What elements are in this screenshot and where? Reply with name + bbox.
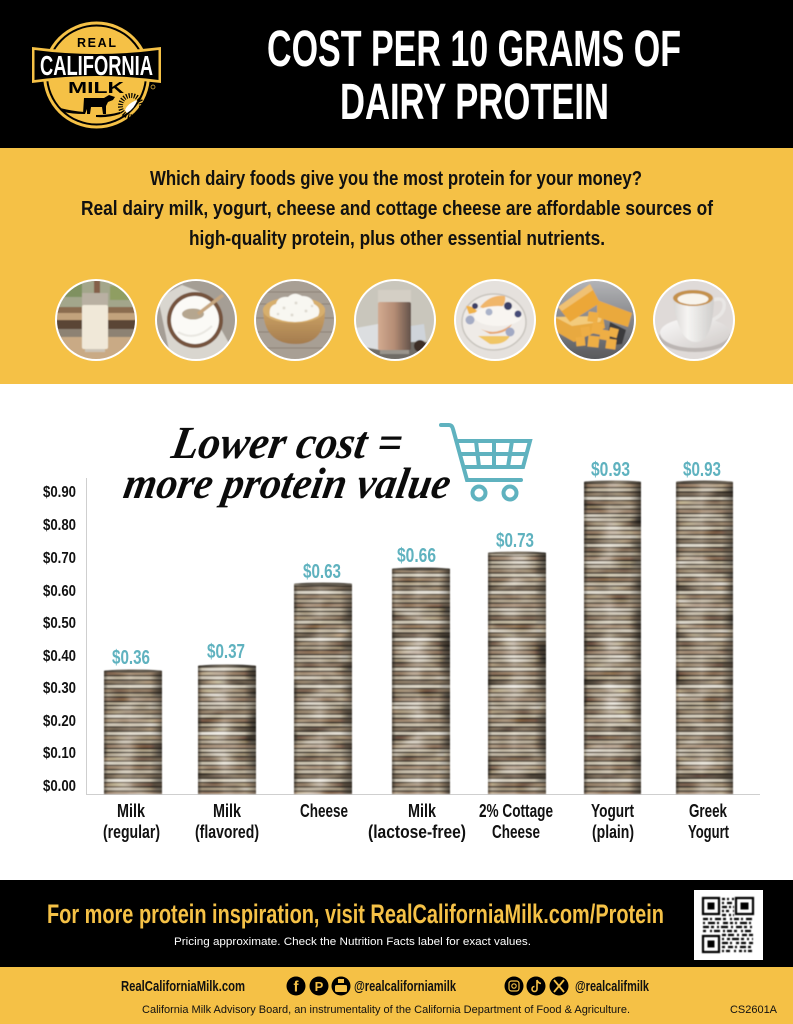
y axis labels: $0.80 — [43, 517, 76, 534]
intro text: high-quality protein, plus other essential nutrients. — [189, 228, 605, 250]
header band — [0, 0, 793, 148]
y axis labels: $0.90 — [43, 484, 76, 501]
logo: Real California Milk: REAL — [77, 36, 116, 50]
chart axes — [86, 478, 760, 794]
intro text: Real dairy milk, yogurt, cheese and cottage cheese are affordable sources of — [81, 198, 713, 220]
photo: cup of coffee — [653, 279, 735, 361]
y axis labels: $0.60 — [43, 583, 76, 600]
category labels: (lactose-free) — [368, 822, 466, 842]
bar: Yogurt (plain) $0.93 — [584, 459, 641, 794]
category labels: Greek — [689, 801, 728, 821]
category labels: Milk — [117, 801, 146, 821]
bar: Greek Yogurt $0.93: $0.93 — [683, 459, 721, 481]
bar: Milk (regular) $0.36: $0.36 — [112, 647, 150, 669]
photo: cheddar cheese blocks — [554, 279, 636, 361]
y axis labels: $0.50 — [43, 615, 76, 632]
website link: RealCaliforniaMilk.com — [121, 978, 245, 995]
chart heading: Lower cost = more protein value: Lower cost = — [167, 418, 407, 469]
intro text — [81, 168, 713, 250]
handle: @realcalifmilk: @realcalifmilk — [575, 978, 649, 995]
intro panel — [0, 148, 793, 384]
chart heading: Lower cost = more protein value — [120, 418, 455, 508]
social icons: Facebook, Pinterest, YouTube: P — [315, 979, 324, 994]
y axis labels: $0.20 — [43, 713, 76, 730]
title: DAIRY PROTEIN — [340, 73, 609, 130]
handle: @realcaliforniamilk: @realcaliforniamilk — [354, 978, 456, 995]
logo: Real California Milk: MILK — [68, 80, 125, 97]
intro text: Which dairy foods give you the most protein for your money? — [150, 168, 642, 190]
bar: Greek Yogurt $0.93 — [676, 459, 733, 794]
category labels: (regular) — [103, 822, 160, 842]
social icons: Facebook, Pinterest, YouTube — [286, 976, 350, 996]
logo: Real California Milk — [32, 22, 161, 128]
bar: Yogurt (plain) $0.93: $0.93 — [591, 459, 630, 481]
photo: glass of milk — [55, 279, 137, 361]
category labels: (flavored) — [195, 822, 259, 842]
category labels: (plain) — [592, 822, 634, 842]
y axis labels — [43, 484, 76, 795]
bar: Milk (flavored) $0.37 — [198, 641, 256, 794]
category labels: Yogurt — [688, 822, 729, 842]
social icons: Instagram, TikTok, X — [504, 976, 568, 996]
bar: Milk (lactose-free) $0.66: $0.66 — [397, 545, 436, 567]
photo: chocolate milk — [354, 279, 436, 361]
bar: 2% Cottage Cheese $0.73: $0.73 — [496, 530, 534, 552]
category labels: 2% Cottage — [479, 801, 553, 821]
QR code — [694, 890, 763, 960]
y axis labels: $0.00 — [43, 778, 76, 795]
photo: yogurt in wooden bowl — [155, 279, 237, 362]
document code: CS2601A — [730, 1004, 778, 1016]
bar: Cheese $0.63 — [294, 561, 352, 794]
bar: Milk (flavored) $0.37: $0.37 — [207, 641, 245, 663]
y axis labels: $0.10 — [43, 745, 76, 762]
title — [267, 20, 681, 130]
category labels: Milk — [408, 801, 437, 821]
category labels: Milk — [213, 801, 242, 821]
bar: Milk (regular) $0.36 — [104, 647, 162, 794]
category labels: Yogurt — [591, 801, 634, 821]
logo: Real California Milk: CALIFORNIA — [40, 50, 153, 81]
social icons: Facebook, Pinterest, YouTube: f — [294, 978, 300, 996]
y axis labels: $0.30 — [43, 680, 76, 697]
call to action band — [0, 880, 793, 967]
photo: yogurt with peaches and blueberries — [454, 279, 536, 361]
category labels: Cheese — [300, 801, 348, 821]
category labels: Cheese — [492, 822, 540, 842]
category labels — [103, 801, 729, 842]
advisory board statement: California Milk Advisory Board, an instrumentality of the California Department of Food & Agriculture. — [142, 1004, 630, 1016]
footer band — [0, 967, 793, 1024]
bar: Milk (lactose-free) $0.66 — [392, 545, 450, 794]
y axis labels: $0.70 — [43, 550, 76, 567]
icon: shopping cart — [441, 425, 530, 500]
bar chart: cost per 10 grams of protein — [43, 459, 760, 842]
pricing note: Pricing approximate. Check the Nutrition Facts label for exact values. — [174, 936, 531, 948]
bar: Cheese $0.63: $0.63 — [303, 561, 341, 583]
bar: 2% Cottage Cheese $0.73 — [488, 530, 546, 794]
photo: cottage cheese in bowl — [254, 279, 336, 361]
chart heading: Lower cost = more protein value: more protein value — [120, 458, 455, 508]
y axis labels: $0.40 — [43, 648, 76, 665]
